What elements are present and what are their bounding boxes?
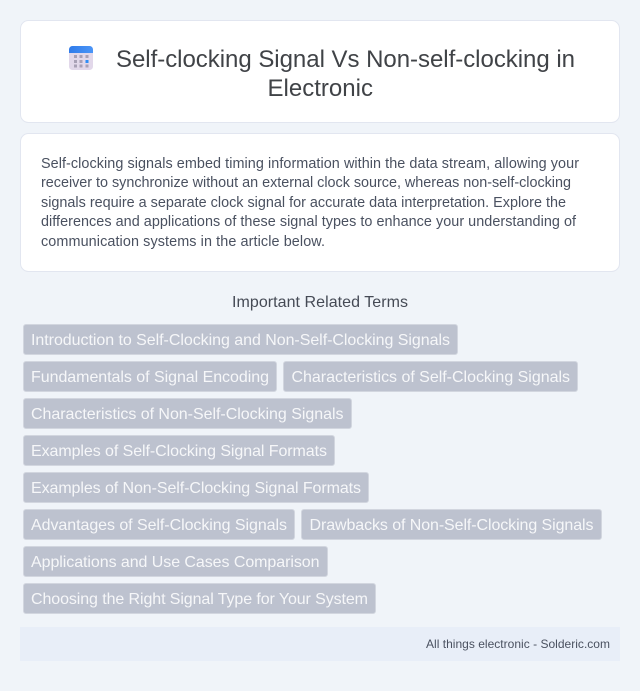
tag: applications: Applications and Use Cases Comparison: [31, 554, 320, 571]
tag: applications: [24, 546, 328, 576]
intro paragraph: receiver to synchronize without an external clock source, whereas non-self-clocking: [41, 175, 571, 191]
tag: non-self-clocking characteristics: [24, 398, 352, 428]
intro paragraph: [41, 156, 579, 250]
footer bar: [20, 627, 620, 661]
title: Electronic: [268, 75, 373, 102]
footer credit: All things electronic - Solderic.com: [426, 637, 610, 651]
intro paragraph: differences and applications of these signal types to enhance your understanding of: [41, 214, 577, 230]
tag: non-self-clocking examples: [24, 472, 368, 502]
tag: advantages: Advantages of Self-Clocking Signals: [31, 517, 287, 534]
tag: self-clocking examples: [24, 436, 334, 466]
tag: fundamentals: Fundamentals of Signal Encoding: [31, 369, 269, 386]
tag: self-clocking characteristics: [284, 362, 578, 392]
panel: intro text card: [20, 134, 620, 272]
heading: important related terms: Important Related Terms: [232, 294, 408, 311]
intro paragraph: signals require a separate clock signal for accurate data interpretation. Explore the: [41, 195, 566, 211]
tag: non-self-clocking characteristics: Characteristics of Non-Self-Clocking Signals: [31, 406, 344, 423]
tag: self-clocking characteristics: Characteristics of Self-Clocking Signals: [292, 369, 570, 386]
tag: non-self-clocking examples: Examples of Non-Self-Clocking Signal Formats: [31, 480, 361, 497]
tag: drawbacks: [302, 510, 602, 540]
tag: choosing: [24, 584, 376, 614]
tag: drawbacks: Drawbacks of Non-Self-Clocking Signals: [310, 517, 594, 534]
intro paragraph: Self-clocking signals embed timing information within the data stream, allowing your: [41, 156, 579, 172]
panel: header card: [20, 20, 620, 122]
title: [116, 46, 575, 102]
tag: fundamentals: [24, 362, 276, 392]
title: Self-clocking Signal Vs Non-self-clocking in: [116, 46, 575, 73]
tag: introduction: Introduction to Self-Clocking and Non-Self-Clocking Signals: [31, 332, 450, 349]
tag: choosing: Choosing the Right Signal Type for Your System: [31, 591, 368, 608]
tag: self-clocking examples: Examples of Self-Clocking Signal Formats: [31, 443, 327, 460]
tag: advantages: [24, 510, 294, 540]
icon: calendar: [69, 46, 93, 70]
intro paragraph: communication systems in the article below.: [41, 234, 325, 250]
tag list: [24, 324, 602, 614]
tag: introduction: [24, 324, 458, 354]
